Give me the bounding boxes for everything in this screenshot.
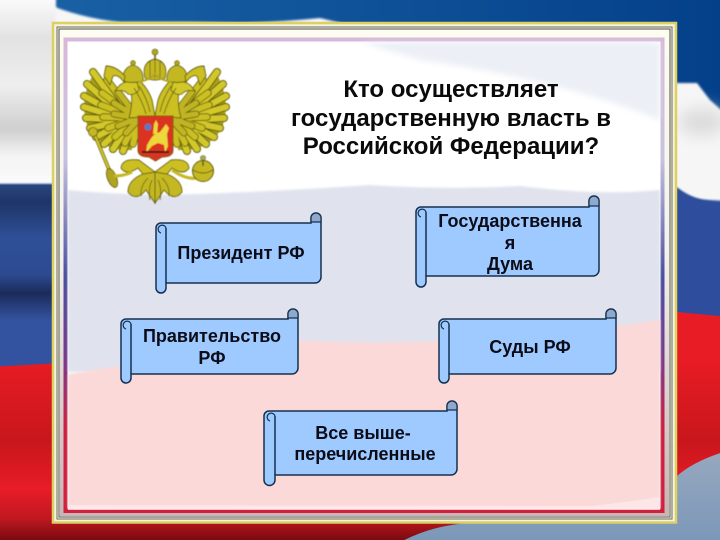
scroll: Суды РФ: Суды РФ: [489, 337, 571, 357]
scroll: Все вышеперечисленные: перечисленные: [294, 444, 436, 464]
scroll: Все вышеперечисленные: [264, 401, 457, 486]
icon: orb: [172, 156, 214, 182]
scroll: Государственная Дума: я: [504, 233, 515, 253]
icon: central crown: [138, 49, 172, 82]
scroll: Правительство РФ: [121, 309, 298, 383]
scroll: Все вышеперечисленные: Все выше-: [315, 423, 411, 443]
scroll: Президент РФ: [156, 213, 321, 293]
title: [291, 76, 611, 160]
icon: sceptre: [88, 128, 132, 189]
scroll: Государственная Дума: Дума: [487, 254, 534, 274]
scroll: Правительство РФ: РФ: [198, 348, 226, 368]
scroll: Суды РФ: [439, 309, 616, 383]
scroll: Правительство РФ: Правительство: [143, 326, 281, 346]
icon: Russian coat of arms, double-headed eagle: [84, 49, 226, 203]
scroll: Государственная Дума: [416, 196, 599, 287]
scroll: Президент РФ: Президент РФ: [177, 243, 305, 263]
title: Российской Федерации?: [303, 133, 599, 160]
title: государственную власть в: [291, 105, 611, 132]
title: Кто осуществляет: [343, 76, 559, 103]
panel: faded flag background: [68, 42, 660, 510]
icon: red shield with rider: [138, 116, 173, 161]
scroll: Государственная Дума: Государственна: [438, 211, 583, 231]
